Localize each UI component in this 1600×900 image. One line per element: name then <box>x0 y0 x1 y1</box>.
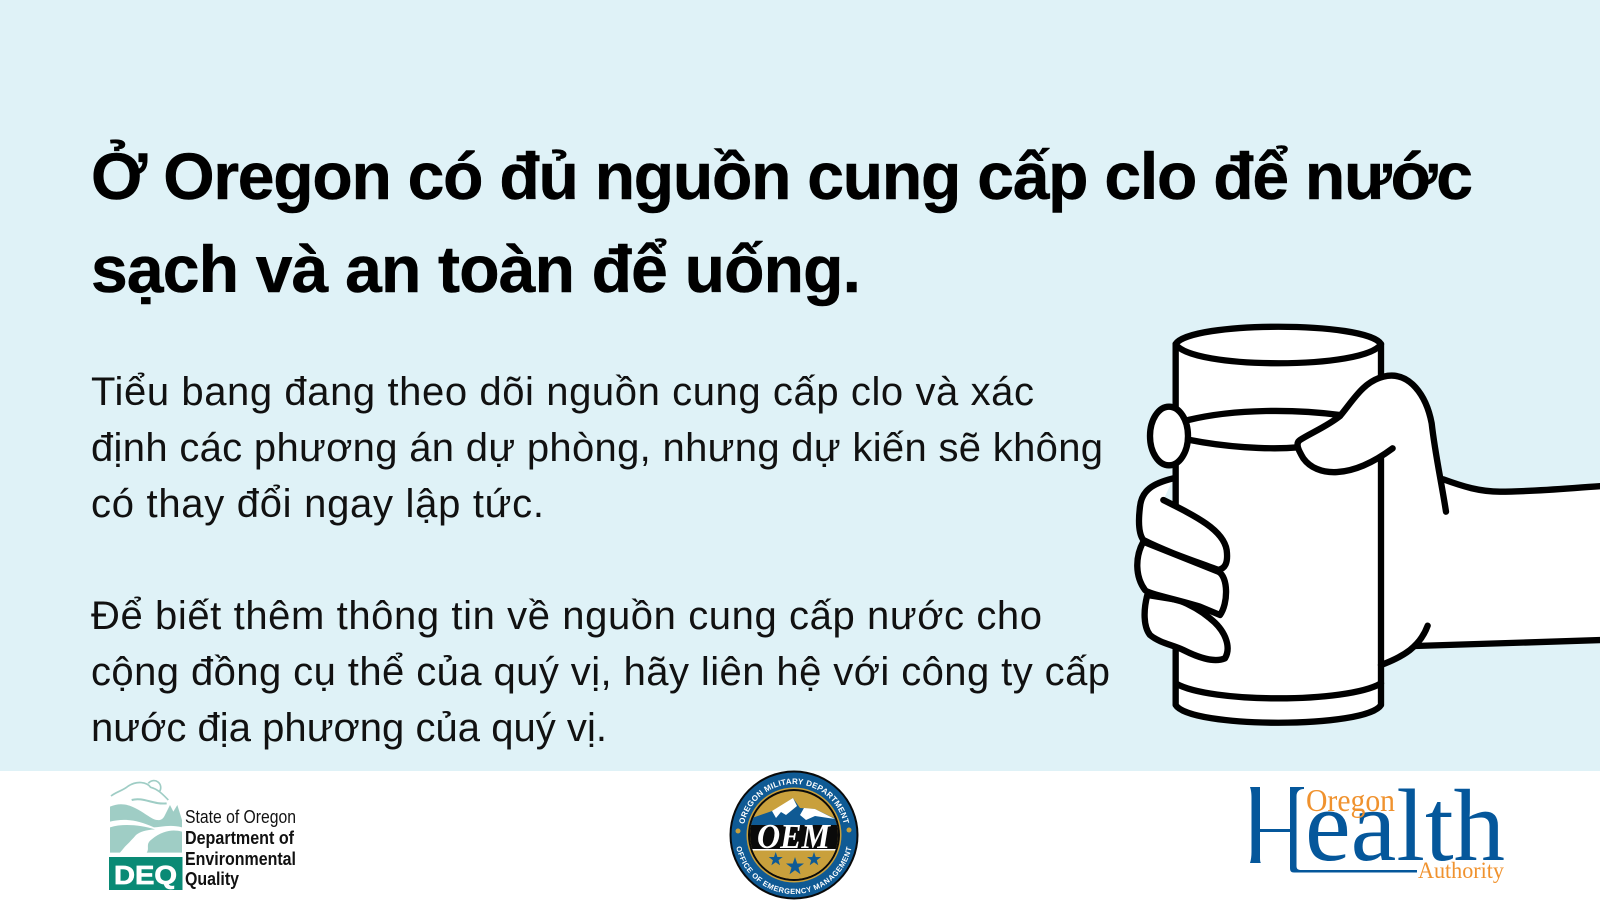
text block: monitoring: Tiểu bang đang theo dõi nguồn cung cấp clo và xác <box>91 370 1034 414</box>
logo: DEQ <box>109 781 296 890</box>
DEQ wordmark: Environmental <box>185 849 296 869</box>
text block: contact: Để biết thêm thông tin về nguồn cung cấp nước cho <box>91 594 1042 638</box>
logo: Oregon Health Authority: Authority <box>1418 858 1504 883</box>
DEQ wordmark <box>185 807 296 889</box>
logo: Oregon Health Authority: ealth <box>1305 769 1505 883</box>
DEQ wordmark: State of Oregon <box>185 807 296 827</box>
text block: monitoring <box>91 370 1103 526</box>
mountain <box>750 798 838 825</box>
title: Ở Oregon có đủ nguồn cung cấp clo để nước <box>91 139 1473 213</box>
logo: OEM seal: OEM <box>757 817 832 856</box>
text block: contact: cộng đồng cụ thể của quý vị, hãy liên hệ với công ty cấp <box>91 650 1110 694</box>
icon: hand holding glass of water <box>1137 327 1600 723</box>
seal lettering: OREGON MILITARY DEPARTMENT <box>739 778 850 824</box>
DEQ wordmark: Quality <box>185 869 239 889</box>
DEQ green box <box>109 857 182 890</box>
text block: monitoring: có thay đổi ngay lập tức. <box>91 482 544 526</box>
text block: contact <box>91 594 1110 750</box>
text block: contact: nước địa phương của quý vị. <box>91 706 607 750</box>
DEQ landscape mark <box>110 781 182 853</box>
footer band <box>0 771 1600 900</box>
title <box>91 139 1473 306</box>
logo: Oregon Health Authority: Oregon <box>1306 782 1395 818</box>
DEQ letters: DEQ <box>114 860 177 890</box>
logo: OEM seal: OFFICE OF EMERGENCY MANAGEMENT <box>736 846 852 894</box>
title: sạch và an toàn để uống. <box>91 232 861 306</box>
DEQ wordmark: Department of <box>185 828 295 848</box>
text block: monitoring: định các phương án dự phòng, nhưng dự kiến sẽ không <box>91 426 1103 470</box>
logo: OEM seal <box>730 770 858 900</box>
